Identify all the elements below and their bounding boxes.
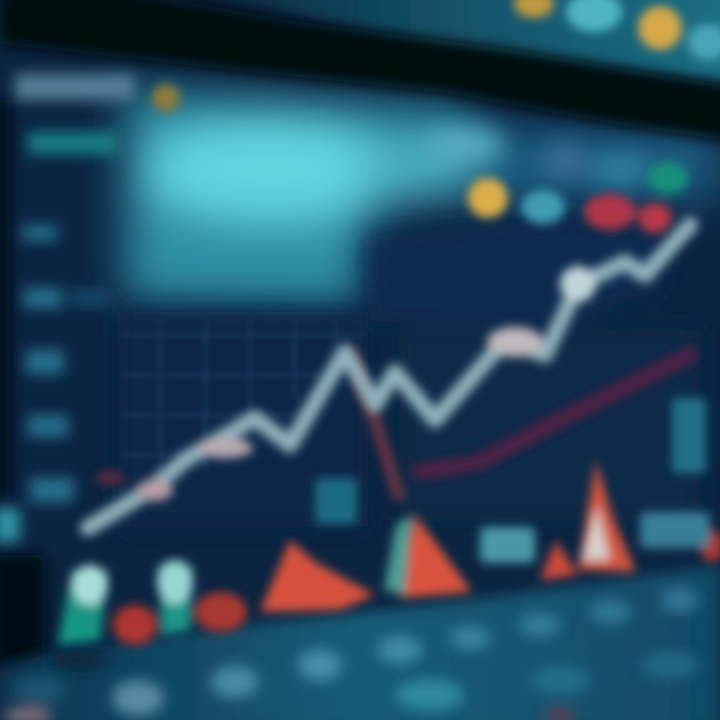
bar chart: volume bars [58, 398, 720, 645]
left axis labels [0, 74, 135, 542]
chart grid lines [120, 320, 365, 480]
line chart: white price line [88, 225, 690, 528]
panel: upper right highlights [425, 129, 650, 186]
panel: tiled floor [0, 565, 720, 720]
bar: red dropping line [350, 350, 400, 500]
teal bars [58, 570, 108, 645]
line chart: maroon trend line [420, 355, 690, 472]
panel: left dark edge [0, 100, 45, 665]
title label top left [15, 74, 135, 100]
panel: top teal band [170, 0, 720, 85]
red bars [113, 605, 157, 645]
panel: bright teal glow [125, 90, 720, 305]
light teal bars [480, 527, 535, 563]
panel: dark band across the top [0, 0, 720, 142]
floor tiles [4, 588, 700, 720]
icon: gold coins [152, 0, 720, 224]
green label top left [28, 132, 118, 154]
panel: dark navy block [118, 218, 700, 527]
red and green ticker markers [584, 162, 688, 233]
